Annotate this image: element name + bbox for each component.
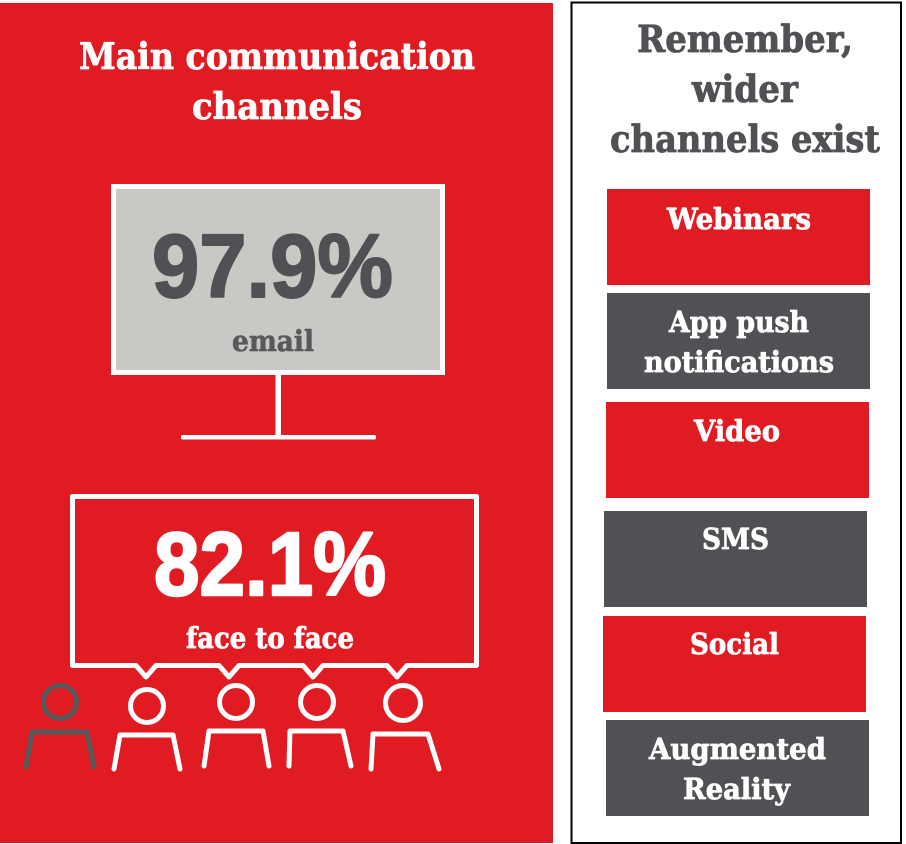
heading: main communication channels: Main communication [79, 36, 475, 78]
speech bubble: face to face statistic [72, 496, 476, 677]
channel: app push notifications: App push [668, 305, 809, 339]
label: face to face: face to face [186, 621, 354, 655]
icon: white person 3 [289, 686, 351, 766]
channel: social: Social [690, 627, 779, 661]
heading: remember, wider channels exist [610, 17, 880, 161]
channel: webinars [607, 189, 870, 285]
panel: wider channels [572, 2, 901, 843]
statistic: 82.1%: 82.1% [154, 515, 386, 615]
heading: remember, wider channels exist: wider [691, 67, 798, 111]
label: email: email [232, 324, 314, 358]
icon: white person 2 [204, 686, 269, 766]
channel: social [603, 616, 866, 712]
channel: app push notifications: notifications [644, 345, 834, 379]
icon: white person 4 [371, 686, 439, 769]
icon: white person 1 [114, 690, 180, 769]
channel: augmented reality [606, 720, 869, 816]
panel: main communication channels [0, 3, 553, 843]
icon: monitor with email statistic [114, 186, 442, 440]
channel: webinars: Webinars [666, 202, 811, 236]
channel: video [606, 402, 869, 498]
channel: app push notifications [607, 293, 870, 389]
channel: sms [604, 511, 867, 607]
channel: augmented reality: Reality [683, 772, 791, 806]
icon: audience of five people [26, 686, 439, 769]
icon: grey person [26, 686, 94, 767]
channel: augmented reality: Augmented [648, 732, 826, 766]
heading: main communication channels [79, 36, 475, 128]
channel: video: Video [693, 414, 780, 448]
heading: remember, wider channels exist: Remember, [637, 17, 853, 61]
channel: sms: SMS [702, 522, 769, 556]
heading: main communication channels: channels [192, 86, 362, 128]
heading: remember, wider channels exist: channels exist [610, 117, 880, 161]
statistic: 97.9%: 97.9% [152, 217, 393, 317]
